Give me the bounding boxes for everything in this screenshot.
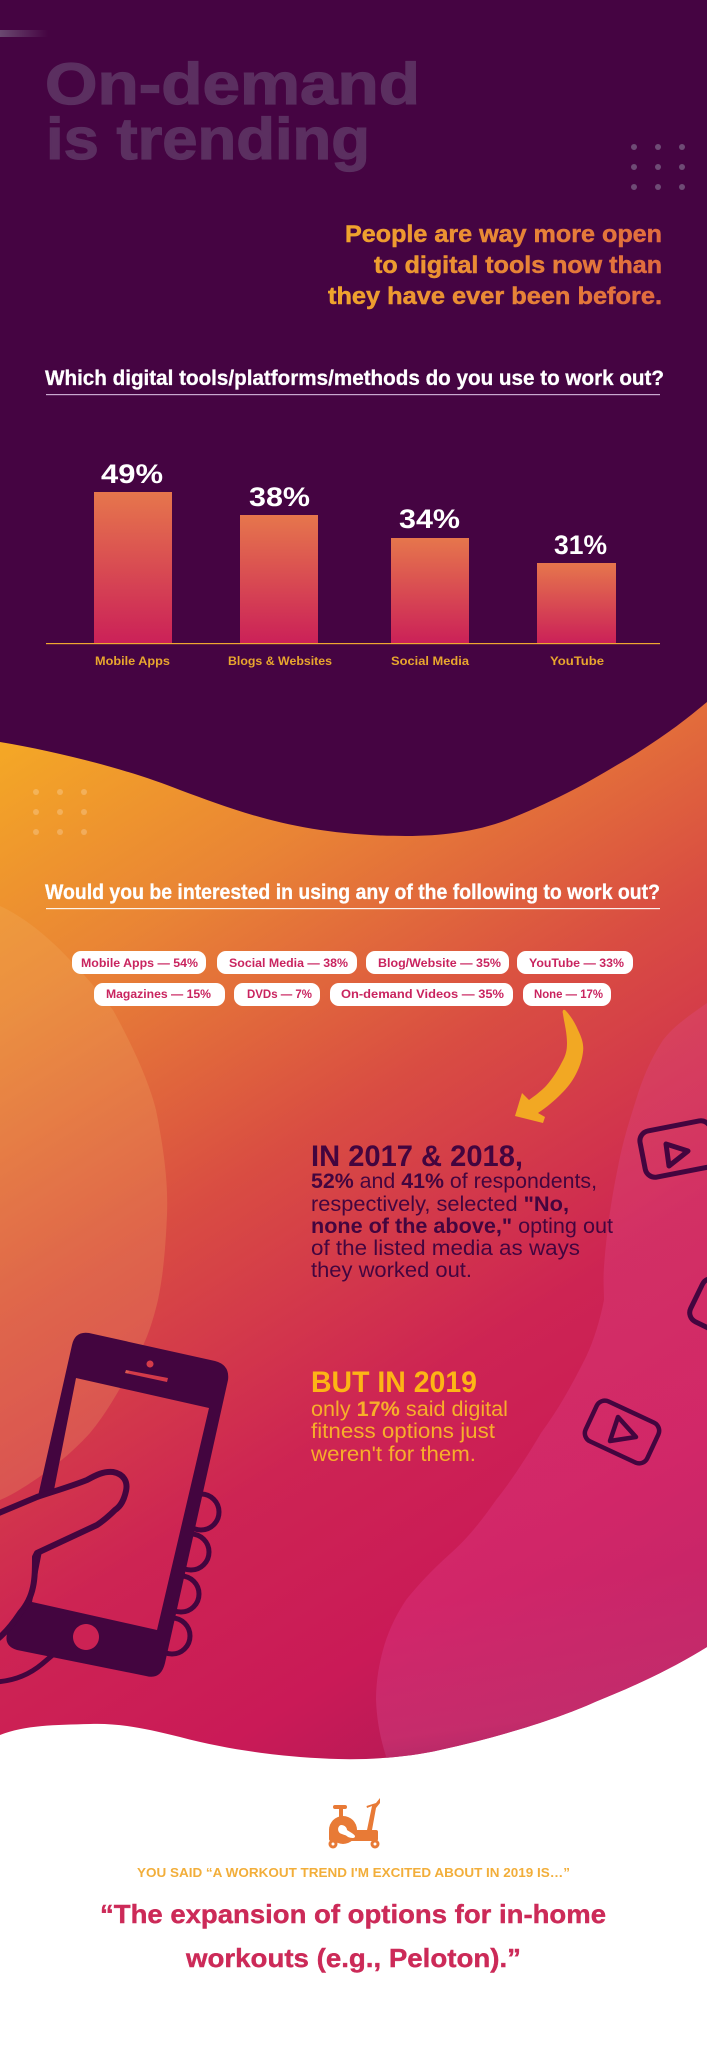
title [45,52,420,172]
pill: social media: Social Media — 38% [229,958,348,970]
pill: none: None — 17% [534,989,603,1001]
text block: but in 2019: BUT IN 2019 [311,1366,477,1399]
top-left glow accent [0,30,48,37]
subheading: they have ever been before. [328,283,662,310]
pill: none [523,983,611,1006]
subheading [328,221,662,310]
icon: play button 3 [582,1398,662,1466]
text block: 2017 and 2018: none of the above," opting out [311,1214,613,1238]
bar chart [46,459,660,668]
dots top right [631,144,685,190]
pills [72,951,633,1006]
purple top panel [0,0,707,836]
title: is trending [46,107,370,172]
bar: mobile apps: Mobile Apps [95,654,170,668]
text block: 2017 and 2018 [311,1140,613,1282]
thumb [0,1472,126,1642]
hand lower edge [0,1654,54,1682]
dots on wave [33,789,87,835]
bar: blogs and websites: 38% [249,482,310,512]
text block: but in 2019 [310,1366,508,1466]
bar: youtube [537,530,616,668]
title: On-demand [45,52,420,117]
left light blob [0,906,167,1500]
you said caption: YOU SAID “A WORKOUT TREND I'M EXCITED ABOUT IN 2019 IS…” [137,1865,570,1880]
pill: magazines [94,983,225,1006]
bar: youtube: 31% [554,530,607,560]
bar: social media: Social Media [391,654,469,668]
question 2: Would you be interested in using any of the following to work out? [45,881,660,904]
pill: blog/website [366,951,509,974]
text block: 2017 and 2018: they worked out. [311,1258,472,1282]
icon: play button 2 [686,1275,707,1349]
pill: on-demand videos [330,983,513,1006]
text block: but in 2019: fitness options just [311,1419,495,1443]
bar: social media: 34% [399,504,460,534]
bar: youtube: YouTube [550,654,604,668]
quote: workouts (e.g., Peloton).” [185,1943,521,1973]
text block: 2017 and 2018: of the listed media as ways [311,1236,580,1260]
text block: 2017 and 2018: IN 2017 & 2018, [311,1140,523,1173]
icon: hand holding phone [0,1333,228,1682]
right pink blob [376,1003,707,1762]
text block: 2017 and 2018: respectively, selected "No, [311,1192,569,1216]
icon: exercise bike [328,1798,380,1848]
pill: dvds [234,983,320,1006]
pill: mobile apps: Mobile Apps — 54% [81,958,198,970]
quote [100,1899,606,1973]
bar: blogs and websites [228,482,332,668]
text block: but in 2019: weren't for them. [310,1442,476,1466]
question 1: Which digital tools/platforms/methods do you use to work out? [45,367,664,390]
gradient wave section background [0,700,707,1759]
fingers [166,1492,222,1656]
pill: on-demand videos: On-demand Videos — 35% [341,989,504,1001]
phone body [6,1333,228,1677]
bar: mobile apps [94,459,172,668]
pill: youtube: YouTube — 33% [529,958,624,970]
text block: but in 2019: only 17% said digital [311,1397,508,1421]
pill: dvds: DVDs — 7% [247,989,312,1001]
icon: play button 1 [638,1119,707,1179]
pill: social media [217,951,357,974]
text block: 2017 and 2018: 52% and 41% of respondents, [311,1169,597,1193]
pill: blog/website: Blog/Website — 35% [378,958,501,970]
bar: social media [391,504,469,668]
subheading: to digital tools now than [374,252,662,279]
arrow [515,1010,583,1123]
bar: mobile apps: 49% [101,459,163,489]
quote: “The expansion of options for in-home [100,1899,606,1929]
subheading: People are way more open [345,221,662,248]
pill: mobile apps [72,951,206,974]
pill: youtube [517,951,633,974]
pill: magazines: Magazines — 15% [106,989,211,1001]
bar: blogs and websites: Blogs & Websites [228,654,332,668]
